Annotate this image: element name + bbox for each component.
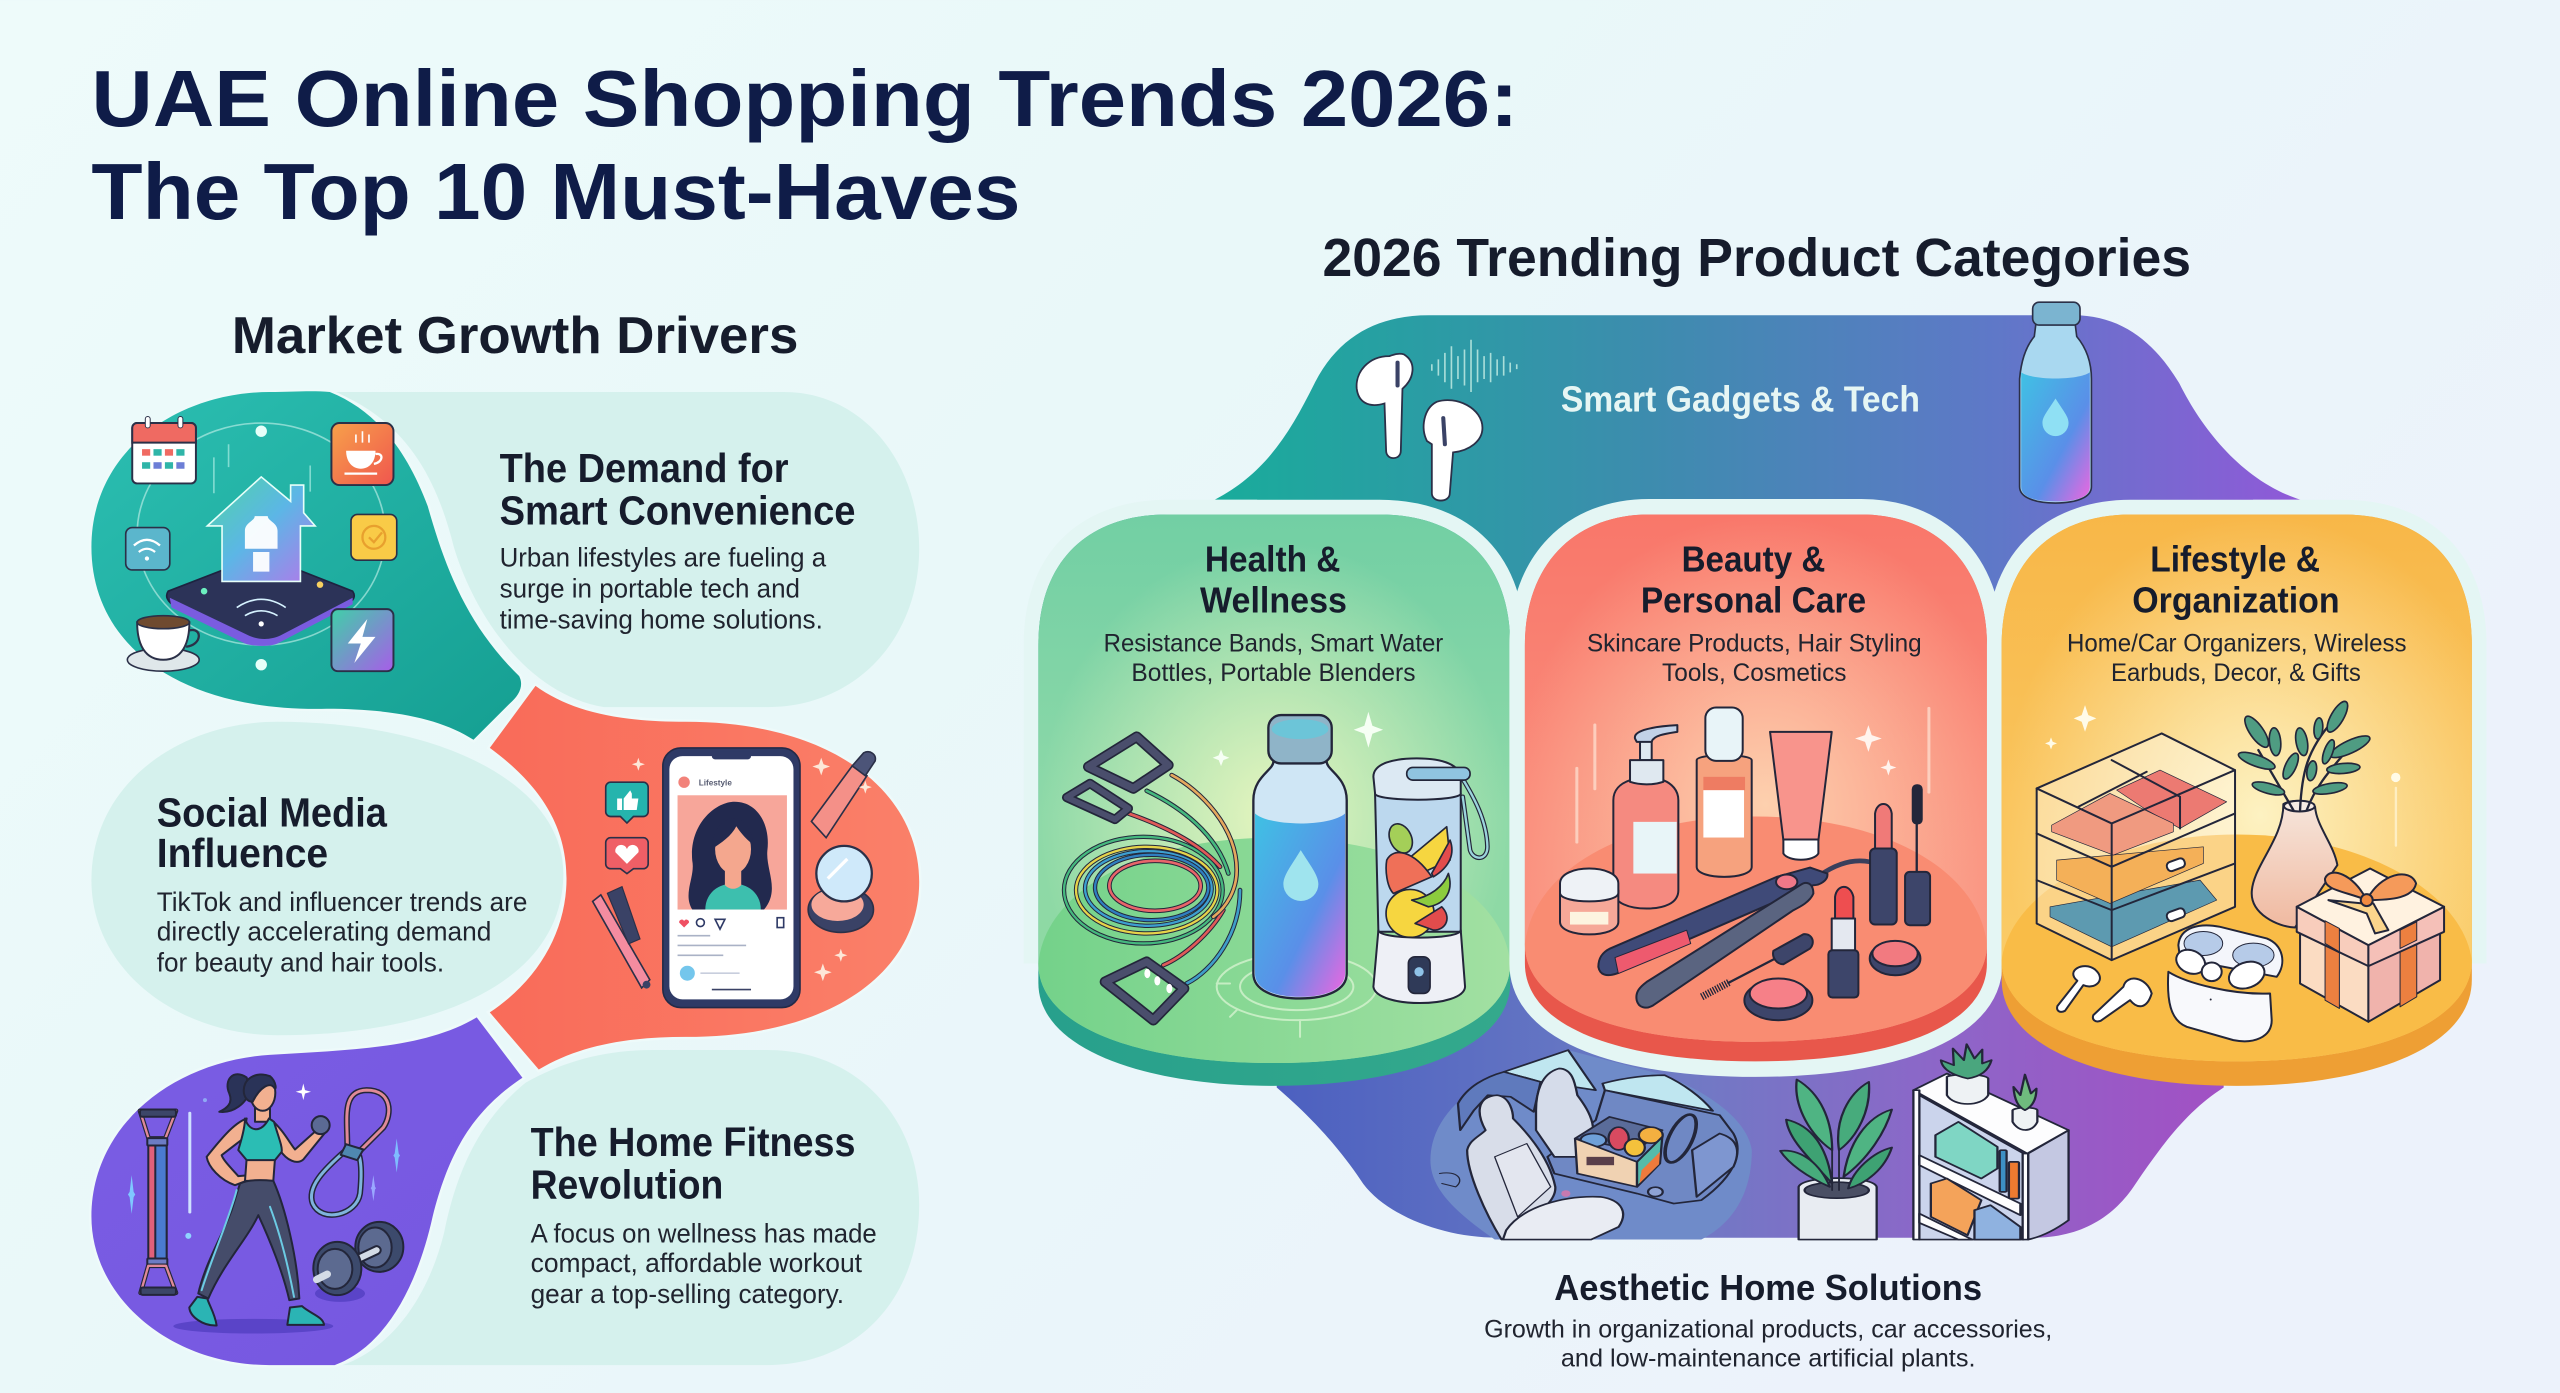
icon: small compact: [1870, 941, 1920, 975]
text pill: smart convenience: [335, 392, 919, 707]
title: UAE Online Shopping Trends 2026:: [91, 54, 1518, 143]
text: aesthetic home solutions: Growth in organizational products, car accessories,: [1484, 1315, 2052, 1343]
icon: coffee cup: [127, 616, 199, 671]
icon: lipstick upright: [1870, 804, 1897, 925]
sparkles: [2045, 705, 2400, 847]
card text: Lifestyle &: [2150, 539, 2320, 580]
text: home fitness: The Home Fitness: [531, 1119, 856, 1165]
text: home fitness: gear a top-selling category.: [531, 1279, 844, 1309]
icon: like bubble: [606, 782, 648, 823]
text: home fitness: [531, 1119, 877, 1309]
table ellipse: [1038, 838, 1510, 1063]
text: aesthetic home solutions: [1484, 1267, 2052, 1373]
icon: compact mirror: [808, 846, 873, 932]
card: health and wellness: [1038, 514, 1510, 1086]
card: beauty and personal care: [1525, 514, 1987, 1061]
glints: [128, 1083, 400, 1239]
glow rings: [1217, 953, 1377, 1037]
icon: tall serum bottle: [1697, 708, 1752, 877]
beauty illustrations: [1560, 707, 1930, 1020]
blob: top gradient: [1215, 315, 2300, 621]
floor shadow: [173, 1319, 333, 1334]
icon: smart home hub: [137, 423, 385, 670]
card glow: [1038, 514, 1510, 1063]
table ellipse: [2002, 834, 2472, 1061]
text: social media: Influence: [157, 830, 328, 876]
sparkles: [1855, 725, 1896, 776]
icon: blush compact: [1744, 979, 1812, 1020]
card text: [2067, 539, 2407, 687]
icon: cream tube: [1770, 732, 1832, 860]
icon: calendar: [132, 416, 196, 483]
icon: mascara wand: [1702, 934, 1813, 997]
text: social media: directly accelerating demand: [157, 917, 491, 947]
icon: resistance band tube: [140, 1109, 176, 1295]
icon: potted plant: [1780, 1080, 1892, 1240]
card text: Health &: [1205, 539, 1340, 580]
icon: loose earbuds: [2057, 966, 2152, 1021]
text pill: home fitness: [343, 1050, 919, 1365]
card text: [1104, 539, 1443, 687]
heading: trending product categories: 2026 Trending Product Categories: [1322, 228, 2191, 288]
title: [91, 54, 1518, 236]
blob: purple: [91, 1017, 522, 1365]
icon: lip gloss: [811, 752, 875, 838]
card text: Earbuds, Decor, & Gifts: [2111, 659, 2361, 687]
card text: Skincare Products, Hair Styling: [1587, 630, 1922, 658]
text: aesthetic home solutions: and low-maintenance artificial plants.: [1561, 1345, 1976, 1373]
card text: Resistance Bands, Smart Water: [1104, 630, 1443, 658]
title: The Top 10 Must-Haves: [91, 147, 1020, 236]
health illustrations: [1064, 712, 1487, 1037]
icon: car interior: [1430, 1050, 1752, 1240]
icon: portable blender: [1373, 758, 1487, 1003]
card text: [1587, 539, 1922, 687]
text: home fitness: compact, affordable workout: [531, 1248, 863, 1278]
icon: loop band: [311, 1090, 389, 1215]
icon: waveform: [1432, 340, 1517, 392]
card text: Bottles, Portable Blenders: [1131, 659, 1416, 687]
icon: smart bottle: [2020, 302, 2091, 503]
text: smart convenience: Smart Convenience: [500, 487, 856, 533]
card halo: [2002, 514, 2472, 963]
text: smart convenience: [500, 445, 856, 635]
card text: Wellness: [1200, 579, 1347, 620]
card surface: [2002, 514, 2472, 1061]
blob: bottom gradient: [1277, 963, 2224, 1238]
icon: heart bubble: [606, 838, 648, 874]
panel: smart gadgets and tech: [1215, 302, 2300, 621]
text: aesthetic home solutions: Aesthetic Home Solutions: [1554, 1267, 1982, 1308]
text: smart convenience: Urban lifestyles are fueling a: [500, 543, 826, 573]
lifestyle illustrations: [2037, 699, 2444, 1041]
icon: pump bottle: [1613, 725, 1678, 909]
icon: hair comb: [593, 887, 650, 989]
card glow: [1525, 514, 1987, 1042]
icon: cream jar: [1560, 869, 1618, 934]
icon: mascara: [1905, 785, 1930, 925]
panel: social media influence: [91, 686, 919, 1070]
text: smart convenience: time-saving home solutions.: [500, 605, 823, 635]
icon: earbuds: [1357, 354, 1482, 501]
text: social media: TikTok and influencer trends are: [157, 887, 527, 917]
icon: gift box: [2297, 868, 2444, 1022]
icon: lipstick small: [1828, 887, 1858, 998]
text: social media: for beauty and hair tools.: [157, 948, 444, 978]
sparkles: [1213, 712, 1383, 766]
icon: wifi tile: [126, 528, 170, 570]
icon: hair straightener: [1598, 861, 1870, 1008]
icon: lightning tile: [331, 609, 393, 671]
glints: [1575, 707, 1930, 844]
fitness illustrations: [128, 1074, 403, 1334]
icon: dumbbell: [313, 1222, 403, 1302]
icon: phone with profile: [663, 748, 800, 1008]
panel: home fitness: [91, 1017, 919, 1365]
card halo and edge: [1525, 514, 1987, 1061]
text: social media: Social Media: [157, 789, 387, 835]
sparkles: [632, 758, 872, 981]
card glow: [2002, 514, 2472, 1061]
icon: shelf with plants: [1913, 1044, 2069, 1240]
card halo: [1038, 514, 1510, 963]
card text: Tools, Cosmetics: [1662, 659, 1847, 687]
icon: yellow check tile: [351, 514, 397, 560]
icon: coffee tile: [331, 423, 393, 485]
icon: fitness woman: [189, 1074, 330, 1326]
icon: resistance bands: [1064, 775, 1240, 983]
text: social media: [157, 789, 527, 978]
card text: Organization: [2132, 579, 2340, 620]
icon: water bottle: [1253, 715, 1347, 998]
card text: Home/Car Organizers, Wireless: [2067, 630, 2407, 658]
table ellipse: [1525, 816, 1987, 1042]
text: home fitness: A focus on wellness has made: [531, 1219, 877, 1249]
icon: earbuds case: [2168, 925, 2282, 1041]
icon: band handles: [1067, 737, 1184, 1020]
card edge: [2002, 514, 2472, 1086]
blob: teal: [91, 391, 521, 740]
card: lifestyle and organization: [2002, 514, 2472, 1086]
text: home fitness: Revolution: [531, 1162, 723, 1208]
panel: smart convenience: [91, 391, 919, 740]
icon: vase and plant: [2237, 699, 2372, 927]
card surface: [1525, 514, 1987, 1042]
panel: aesthetic home solutions: [1277, 963, 2224, 1240]
card text: Personal Care: [1641, 579, 1866, 620]
card surface: [1038, 514, 1510, 1063]
card edge: [1038, 514, 1510, 1086]
heading: market growth drivers: Market Growth Drivers: [232, 307, 798, 365]
icon: phone with profile: Lifestyle: [699, 778, 732, 787]
icon: acrylic organizer: [2037, 733, 2235, 960]
text: smart convenience: The Demand for: [500, 445, 789, 491]
home illustrations: [1430, 1044, 2069, 1240]
label: smart gadgets: Smart Gadgets & Tech: [1561, 379, 1920, 420]
text pill: social media: [91, 722, 563, 1035]
blob: coral: [490, 686, 919, 1070]
card text: Beauty &: [1682, 539, 1825, 580]
text: smart convenience: surge in portable tech and: [500, 574, 800, 604]
